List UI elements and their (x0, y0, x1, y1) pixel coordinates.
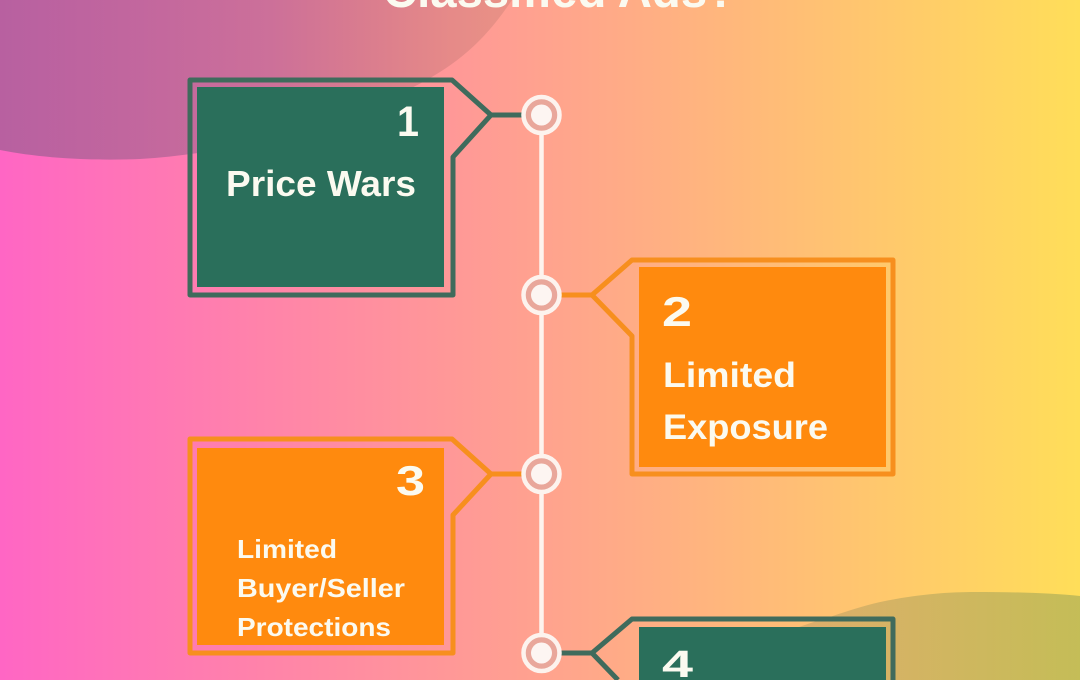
card 1 node (524, 97, 560, 133)
card 1 outline (190, 80, 491, 295)
card 3 label: Buyer/Seller (237, 573, 405, 603)
card 2: Limited Exposure (524, 260, 893, 474)
card 2 label: Exposure (663, 408, 828, 447)
card 3 node (524, 456, 560, 492)
card 2 fill (639, 267, 886, 467)
card 3 label: Limited (237, 534, 337, 564)
top-left blob (0, 0, 512, 160)
card 1: Price Wars (190, 80, 560, 295)
card 2 connector (560, 292, 592, 298)
card 1 label: Price Wars (226, 163, 416, 204)
card 4 node (524, 635, 560, 671)
card 3 label (237, 534, 405, 642)
card 3 connector (491, 472, 524, 476)
card 4 connector (560, 650, 592, 656)
card 3 outline (190, 439, 491, 653)
card 3 number: 3 (396, 457, 425, 504)
card 1 number: 1 (397, 98, 419, 146)
card 2 node (524, 277, 560, 313)
card 4 fill (639, 627, 886, 680)
card 1 fill (197, 87, 444, 287)
card 4 outline (592, 619, 893, 680)
timeline vertical line (539, 115, 544, 653)
card 3: Limited Buyer/Seller Protections (190, 439, 560, 653)
card 2 number: 2 (662, 288, 692, 335)
card 2 label: Limited (663, 356, 796, 395)
bottom-right blob (730, 592, 1080, 680)
card 2 outline (592, 260, 893, 474)
card 1 connector (491, 112, 524, 118)
card 3 label: Protections (237, 612, 391, 642)
card 4 (524, 619, 893, 680)
card 2 label (663, 356, 828, 447)
card 3 fill (197, 448, 444, 645)
